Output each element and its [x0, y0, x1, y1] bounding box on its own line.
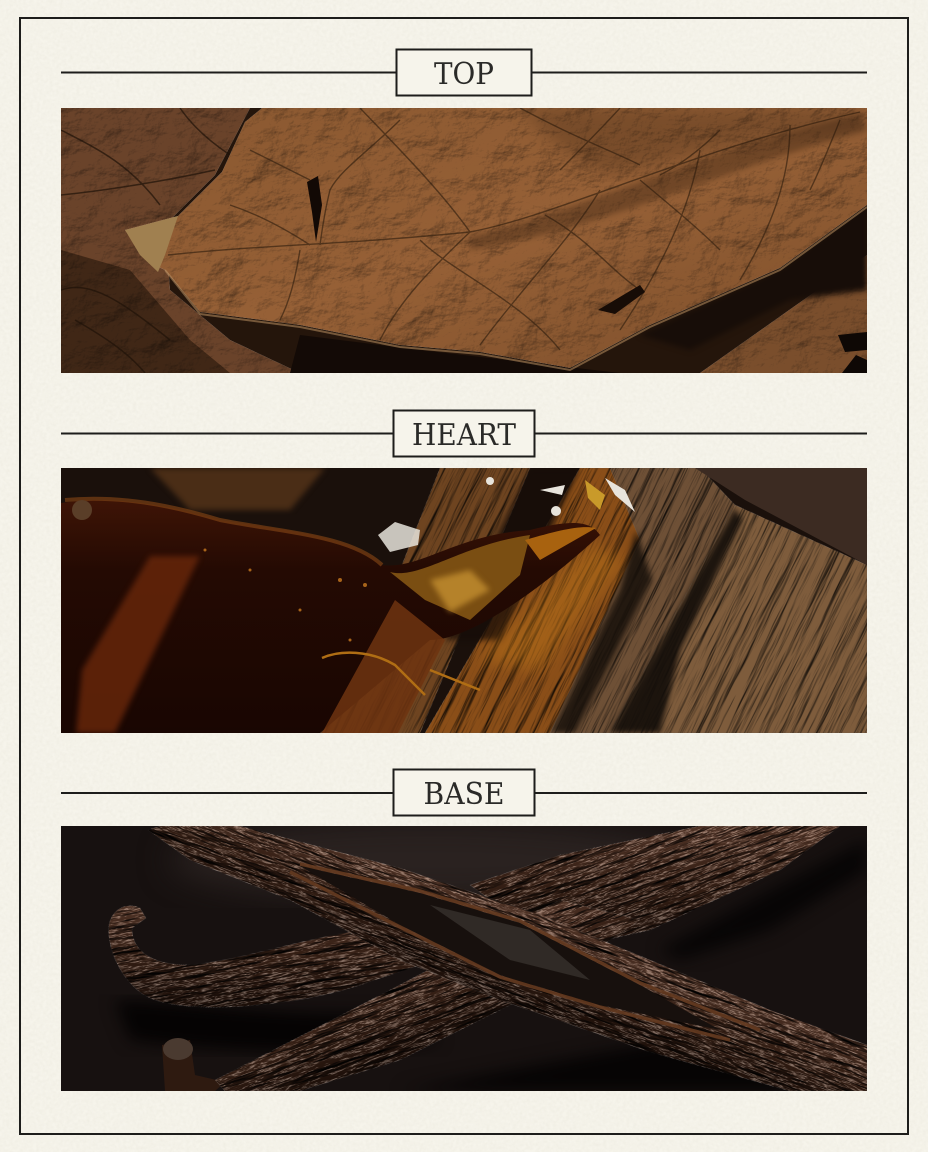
whiskey liquid [61, 500, 600, 733]
heading: base: BASE [424, 777, 504, 812]
bean: lower stem [162, 1040, 225, 1091]
heading: top: TOP [434, 57, 494, 92]
leaf tip [125, 216, 178, 272]
photo: whiskey on oak barrel [61, 468, 867, 733]
oak planks, grain rotated along the barrel [320, 468, 867, 733]
bean: large split [148, 826, 867, 1091]
main leaf [125, 108, 867, 368]
bean: lower crossing [215, 900, 640, 1091]
split rims [290, 864, 760, 1040]
background leaves [61, 108, 867, 373]
shadow under beans [119, 1000, 346, 1052]
heading: heart: HEART [412, 418, 516, 453]
liquid highlights [65, 499, 382, 565]
leaf fold shading [470, 114, 867, 250]
photo: dried tobacco leaf [61, 108, 867, 373]
heading: heart [61, 410, 867, 456]
bean end nub [163, 1038, 193, 1060]
leaf tears [307, 176, 322, 242]
bean: upper-right crossing [470, 826, 840, 938]
splash droplets [378, 477, 635, 552]
heading: base [61, 770, 867, 816]
photo: vanilla beans [61, 826, 867, 1091]
heading: top [61, 50, 867, 96]
charred seams [552, 530, 652, 733]
bubbles in liquid [204, 548, 367, 642]
leaf veins [168, 108, 860, 350]
dark iron band [695, 468, 867, 565]
split interior with seeds [300, 866, 720, 1030]
amber glow on plank [480, 545, 625, 670]
bean: curved hook [108, 906, 416, 1008]
